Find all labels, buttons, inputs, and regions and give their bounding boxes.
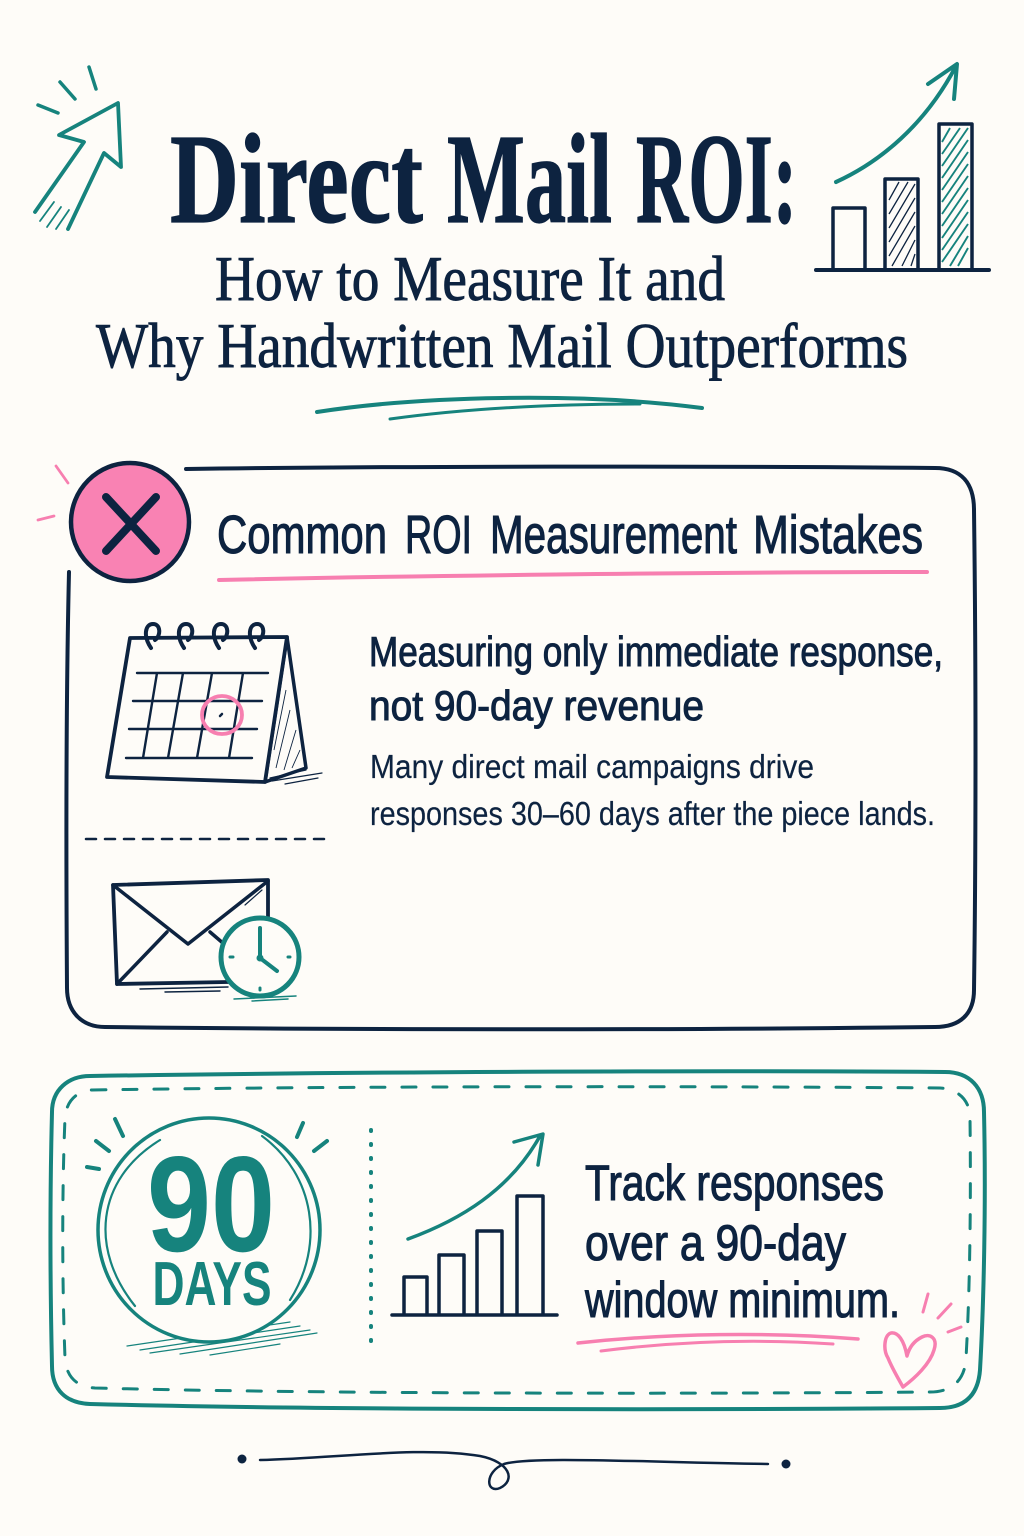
badge: 90 days: DAYS [152,1250,272,1319]
dotted divider [369,1130,373,1350]
panel heading: Measurement [490,505,737,565]
badge: 90 days: 90 [147,1128,275,1280]
mistake heading: not 90-day revenue [369,682,704,729]
icon: pink heart [885,1294,961,1387]
icon: desk calendar [107,624,322,784]
mistake heading [369,628,943,729]
mistake description [370,748,935,832]
tip underline [578,1334,858,1351]
panel heading: Mistakes [753,505,923,565]
icon: pink X badge [38,463,189,581]
title: ROI: [636,108,797,250]
icon: rising bars [392,1134,557,1315]
panel heading: Common [217,505,387,565]
panel: common ROI measurement mistakes [38,463,976,1029]
subtitle: How to Measure It and [215,243,725,314]
panel: 90-day tip [50,1071,985,1409]
subtitle: Why Handwritten Mail Outperforms [96,310,908,381]
tip text: over a 90-day [585,1215,846,1271]
bottom flourish [238,1452,790,1489]
title: Mail [447,108,612,250]
title underline [317,398,702,419]
tip text [584,1155,900,1328]
panel heading [217,505,923,565]
tip text: Track responses [585,1155,884,1211]
mistake description: Many direct mail campaigns drive [370,748,814,785]
heading underline [219,572,927,580]
subtitle [96,243,908,381]
mistake description: responses 30–60 days after the piece lands. [370,795,935,832]
icon: envelope with clock [113,880,299,1001]
icon: teal arrow with spark lines [35,67,121,229]
panel heading: ROI [405,505,472,565]
title: Direct [170,108,423,250]
divider between icons [86,838,328,840]
title [170,108,797,250]
tip text: window minimum. [584,1272,900,1328]
icon: rising bar chart [816,64,989,270]
badge: 90 days [87,1118,327,1355]
